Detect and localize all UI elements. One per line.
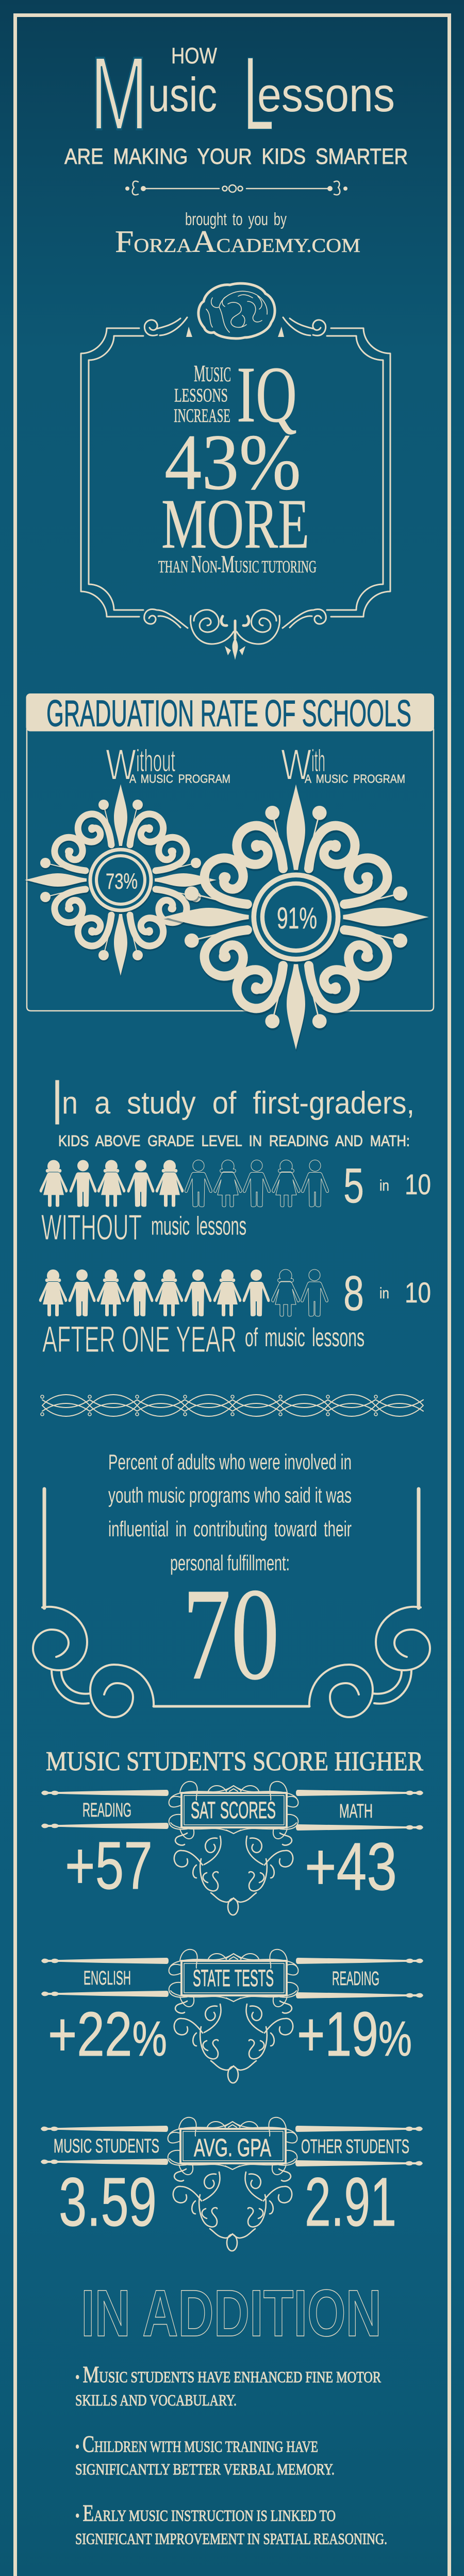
iq stat: INCREASE [174,405,230,427]
subheading: KIDS ABOVE GRADE LEVEL IN READING AND MATH: [58,1132,410,1150]
title block [64,35,408,169]
iq stat: IQ [237,350,297,439]
top flourishes [144,317,326,337]
bullet: fine motor: SKILLS AND VOCABULARY. [75,2391,237,2409]
panel: sat scores [41,1782,423,1915]
bullet: verbal memory: SIGNIFICANTLY BETTER VERBAL MEMORY. [75,2460,335,2478]
label: after one year of music lessons: of music lessons [245,1323,364,1352]
ornament [169,1950,298,2083]
panel: in addition [75,2277,387,2548]
bullet: spatial reasoning [75,2500,387,2548]
label: without music lessons: music lessons [151,1212,246,1241]
site name: FORZAACADEMY.COM [115,225,360,259]
title: how: HOW [171,43,217,69]
stat: 5 in 10: 5 [343,1158,364,1213]
description text: youth music programs who said it was [108,1483,352,1507]
label: with: W [281,740,311,789]
ornament chart: 91 percent with program: 91% [277,902,317,935]
panel: graduation rate of schools [25,693,434,1052]
ornament chart: 91 percent with program [163,784,429,1052]
lattice divider [41,1395,423,1416]
heading: n a study of first-graders, [62,1086,415,1121]
stat: 5 in 10: in [379,1177,389,1194]
panel: iq stat frame [81,317,390,660]
description text [108,1450,352,1575]
heading [51,1066,415,1139]
ornament [169,1782,298,1915]
title divider [125,181,347,195]
panel: personal fulfillment [33,1450,430,1717]
ornament chart: 73 percent without program: 73% [106,869,138,894]
label: without: W [106,740,136,789]
panel: state tests [41,1950,423,2083]
pictogram: 5 in 10 [40,1160,328,1207]
label: after one year of music lessons: AFTER ONE YEAR [42,1319,237,1360]
drumstick rules [41,2126,423,2166]
label: with: A MUSIC PROGRAM [305,772,405,785]
stat: 5 in 10 [343,1158,431,1213]
iq stat: MUSIC [194,360,231,386]
music students label: MUSIC STUDENTS [54,2136,159,2157]
reading label: READING [82,1800,131,1821]
more: MORE [161,484,309,563]
stat: 3.59: 3.59 [59,2164,157,2241]
label: without [106,740,230,789]
heading: I [51,1066,63,1139]
bullet: fine motor [75,2361,381,2409]
title: music lessons: usic [148,67,217,122]
than non-music tutoring: THAN NON-MUSIC TUTORING [158,551,317,578]
label: with: ith [311,743,325,778]
label: without: ithout [136,743,175,778]
title: music lessons: L [243,35,274,151]
bullet: verbal memory [75,2431,335,2478]
panel: first-graders study [39,1066,431,1360]
brought to you by [115,210,360,259]
label: without music lessons: WITHOUT [41,1207,142,1247]
bullet: spatial reasoning: • EARLY MUSIC INSTRUCTION IS LINKED TO [75,2500,336,2526]
scroll frame [33,1489,430,1717]
ornament chart: 73 percent without program [25,784,217,977]
stat: plus 22 percent: +22% [48,1999,167,2069]
43 percent: 43% [164,418,301,506]
label: with [281,740,405,789]
stat: plus 57: +57 [65,1827,153,1903]
english label: ENGLISH [84,1968,131,1989]
ornament [168,2117,297,2251]
bullet: fine motor: • MUSIC STUDENTS HAVE ENHANCED FINE MOTOR [75,2361,381,2387]
panel outline [27,729,434,1011]
bullet: verbal memory: • CHILDREN WITH MUSIC TRAINING HAVE [75,2431,318,2457]
stat: plus 19 percent: +19% [297,1999,412,2069]
math label: MATH [339,1801,373,1822]
stat: 5 in 10: 10 [405,1168,431,1200]
byline: brought to you by [185,210,287,229]
subtitle: ARE MAKING YOUR KIDS SMARTER [64,144,408,169]
stat: 8 in 10: in [379,1285,389,1302]
frame lines [81,328,390,617]
stat: 70: 70 [183,1561,279,1707]
iq stat: LESSONS [174,385,228,406]
stat: plus 43: +43 [305,1828,397,1904]
stat: 8 in 10: 10 [405,1276,431,1309]
iq stat [174,350,297,439]
title: music lessons: M [90,35,148,151]
box label: SAT SCORES [191,1797,276,1823]
stat: 8 in 10: 8 [343,1266,364,1321]
label: without: A MUSIC PROGRAM [129,772,230,785]
bottom flourish [144,609,326,660]
panel: average gpa [41,2117,423,2251]
pictogram: 8 in 10 [39,1269,328,1316]
drumstick rules [41,1958,423,1998]
box label: AVG. GPA [194,2134,271,2162]
drumstick rules [41,1790,423,1831]
title: music lessons: essons [257,67,395,122]
reading label: READING [332,1968,379,1990]
icon: brain [198,283,275,338]
stat: 8 in 10 [343,1266,431,1321]
box label: STATE TESTS [193,1965,274,1991]
title: music lessons [90,35,395,151]
stat: 2.91: 2.91 [305,2164,396,2241]
description text: personal fulfillment: [170,1551,290,1575]
